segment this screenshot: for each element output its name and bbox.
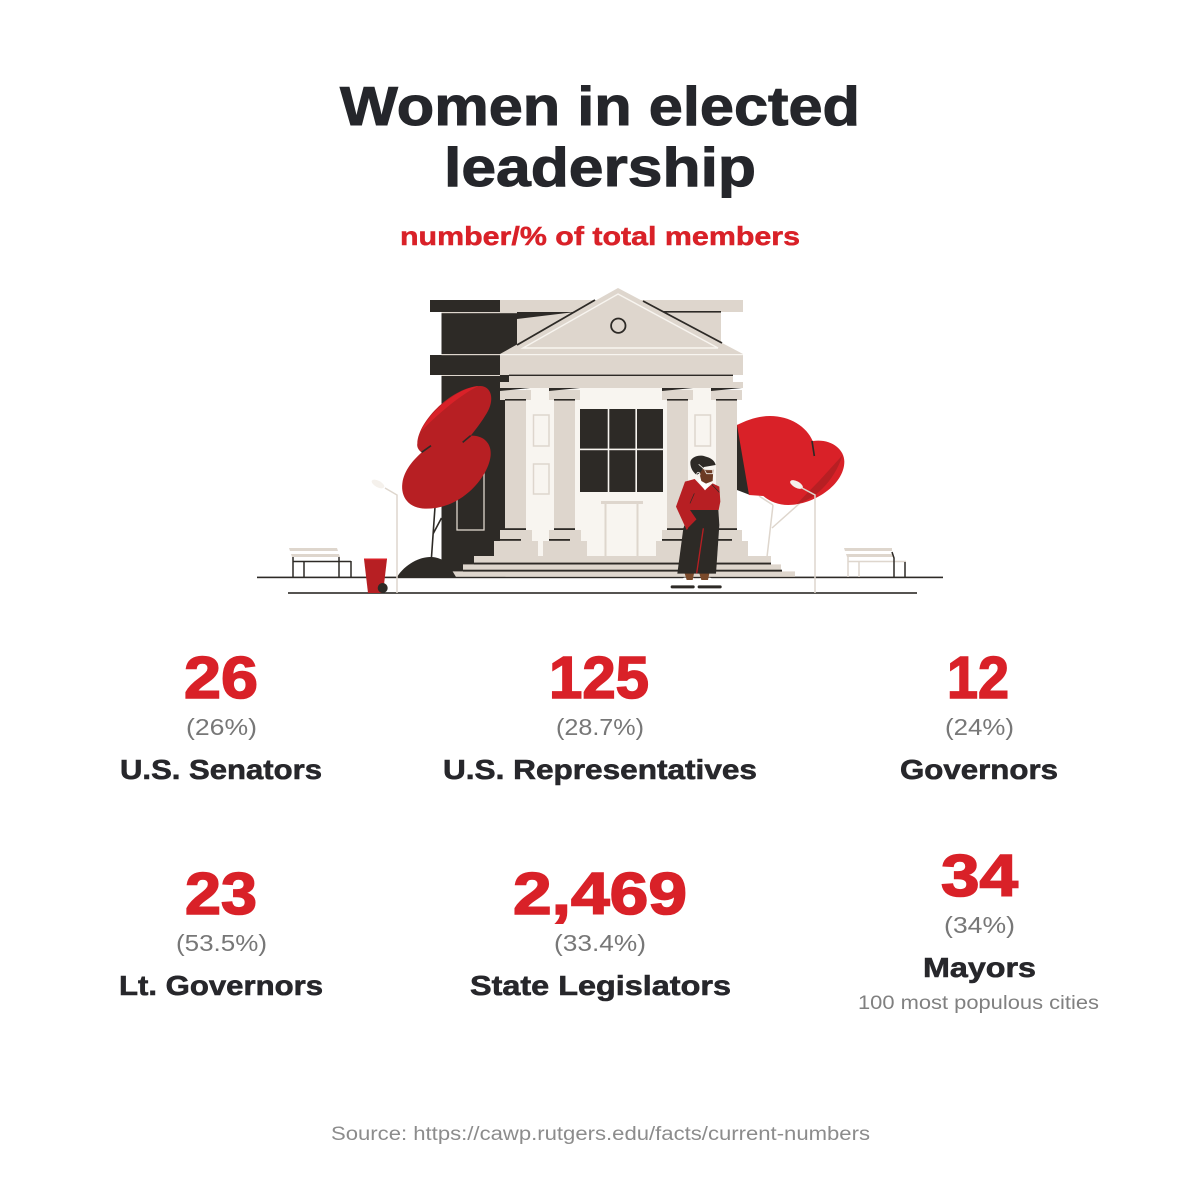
stat: U.S. Senators: 26 [184, 645, 258, 711]
stat: U.S. Representatives: U.S. Representatives [443, 754, 757, 785]
bench: right [844, 548, 906, 577]
stat: U.S. Senators [120, 645, 322, 785]
stat: U.S. Representatives: (28.7%) [556, 714, 644, 740]
building: window [580, 409, 663, 492]
stat: Lt. Governors: Lt. Governors [119, 970, 323, 1001]
trousers [677, 510, 719, 574]
stat: U.S. Representatives [443, 645, 757, 785]
collar [698, 478, 709, 490]
building: facade [526, 388, 720, 556]
illustration: government building scene [257, 288, 943, 594]
title: leadership [444, 136, 756, 198]
stat: Mayors: Mayors [923, 952, 1036, 983]
stat: U.S. Senators: (26%) [186, 714, 257, 740]
stat: Lt. Governors [119, 861, 323, 1001]
lamp: right [789, 478, 815, 593]
tree: right red tree [737, 416, 844, 557]
shoes [671, 573, 722, 588]
stat: Governors: (24%) [945, 714, 1014, 740]
stat: State Legislators: State Legislators [470, 970, 731, 1001]
source note: Source: https://cawp.rutgers.edu/facts/current-numbers [331, 1124, 870, 1145]
figure: woman standing [671, 456, 722, 588]
stat: Mayors [858, 843, 1099, 1014]
building: door [601, 501, 643, 556]
stat: U.S. Representatives: 125 [549, 645, 649, 711]
stat: State Legislators: 2,469 [513, 861, 687, 927]
building: columns [494, 388, 748, 556]
stat: Mayors: 34 [941, 843, 1018, 909]
building: upper wing and roof [500, 288, 743, 356]
lamp: left [370, 478, 397, 593]
building: steps [449, 556, 795, 577]
tree: left red tree [397, 386, 491, 577]
title [340, 75, 860, 198]
building: dark wing [430, 300, 518, 577]
stat: Governors: 12 [947, 645, 1009, 711]
stat: U.S. Senators: U.S. Senators [120, 754, 322, 785]
icon: red trash bin [364, 558, 388, 593]
stat: Lt. Governors: (53.5%) [176, 930, 267, 956]
stat: State Legislators [470, 861, 731, 1001]
bench: left [289, 548, 351, 577]
hair [690, 456, 716, 475]
title: Women in elected [340, 75, 860, 137]
stat: Mayors: 100 most populous cities [858, 993, 1099, 1014]
building: entablature [500, 354, 743, 388]
ground lines [257, 577, 943, 594]
stat: Mayors: (34%) [944, 912, 1015, 938]
stat: Lt. Governors: 23 [185, 861, 257, 927]
stat: State Legislators: (33.4%) [554, 930, 646, 956]
head [698, 469, 713, 484]
glasses and earring [697, 464, 713, 476]
stat: Governors [900, 645, 1058, 785]
stat: Governors: Governors [900, 754, 1058, 785]
sweater [676, 479, 720, 530]
subtitle: number/% of total members [400, 221, 800, 251]
